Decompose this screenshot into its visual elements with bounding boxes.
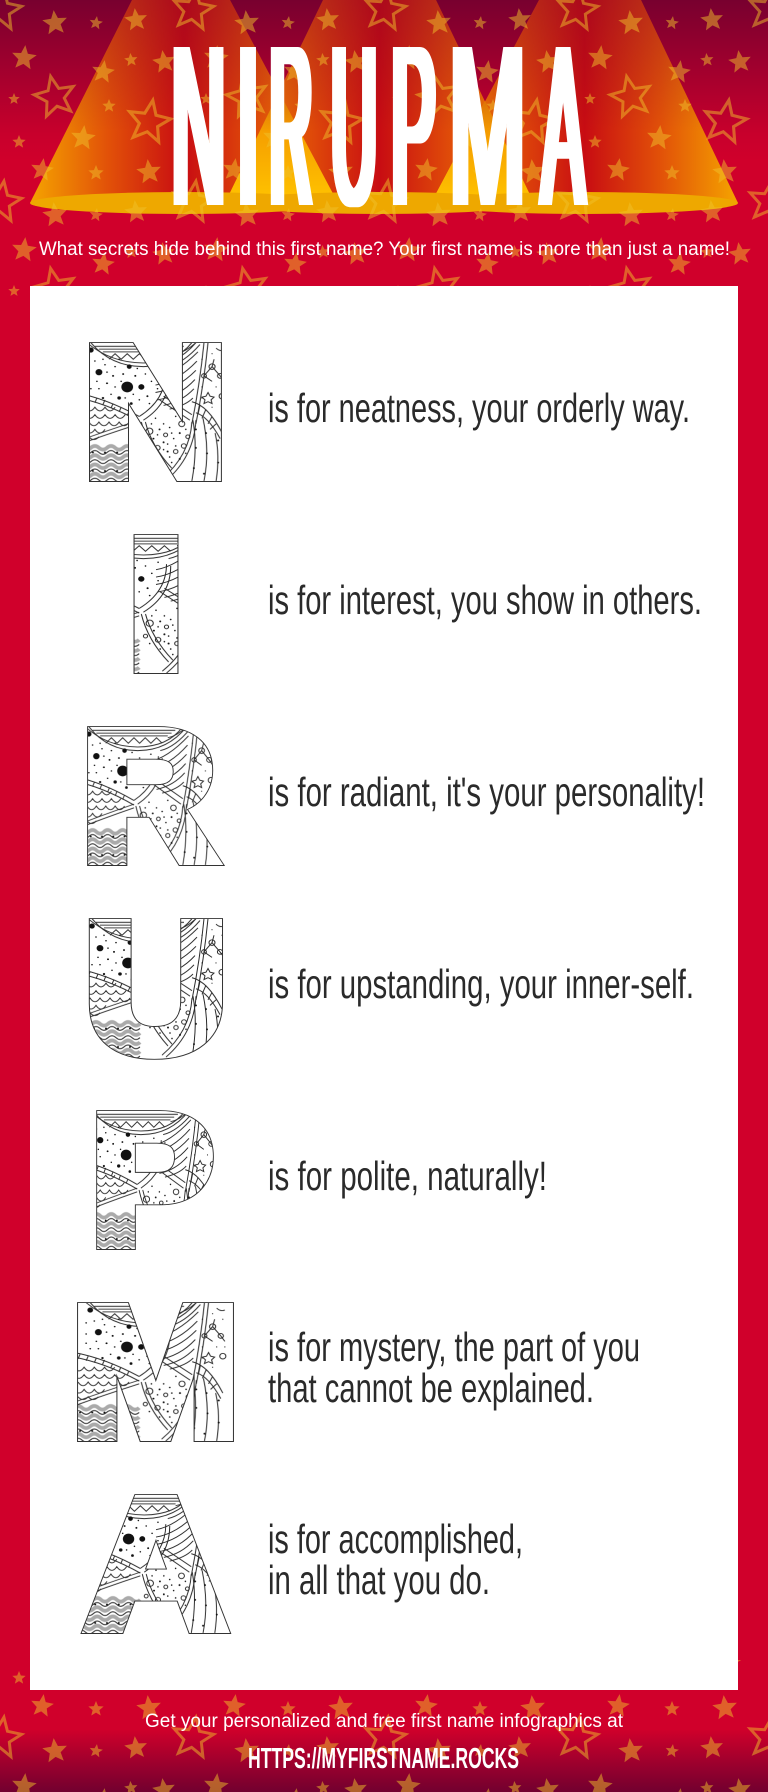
row M: [71, 1269, 640, 1475]
tagline: What secrets hide behind this first name? Your first name is more than just a name!: [39, 239, 730, 260]
icon: letter P: P: [90, 1078, 214, 1283]
row A: [85, 1462, 523, 1667]
footer line: Get your personalized and free first name infographics at: [145, 1711, 624, 1732]
row P: [90, 1078, 547, 1283]
title: U: [331, 0, 377, 254]
stars top: [0, 0, 768, 305]
icon: letter A: A: [85, 1462, 227, 1667]
icon: letter U: U: [84, 885, 228, 1091]
row A: in all that you do.: [268, 1557, 490, 1603]
title: P: [391, 0, 436, 254]
title: A: [542, 0, 585, 254]
icon: letter I: I: [127, 500, 185, 707]
title: M: [449, 0, 526, 255]
row N: [83, 309, 690, 515]
stars bottom: [0, 1660, 768, 1792]
spotlights: [30, 0, 738, 214]
footer url: HTTPS://MYFIRSTNAME.ROCKS: [248, 1743, 519, 1775]
title: R: [270, 0, 312, 254]
row I: [127, 500, 702, 707]
text: A: is for accomplished,: [268, 1516, 523, 1562]
title: [171, 0, 585, 255]
row M: that cannot be explained.: [268, 1365, 594, 1411]
icon: letter R: R: [81, 693, 217, 899]
icon: letter M: M: [71, 1269, 240, 1475]
title: I: [236, 0, 260, 254]
icon: letter N: N: [83, 309, 228, 515]
icon: letter U: U: [84, 885, 228, 1091]
icon: letter A: A: [85, 1462, 227, 1667]
icon: letter P: P: [90, 1078, 214, 1283]
title: N: [171, 0, 226, 255]
row U: [84, 885, 694, 1091]
row R: [81, 693, 705, 899]
panel: white card: [30, 286, 738, 1690]
icon: letter N: N: [83, 309, 228, 515]
icon: letter M: M: [71, 1269, 240, 1475]
text: P: is for polite, naturally!: [268, 1153, 547, 1199]
icon: letter I: I: [127, 500, 185, 707]
icon: letter R: R: [81, 693, 217, 899]
